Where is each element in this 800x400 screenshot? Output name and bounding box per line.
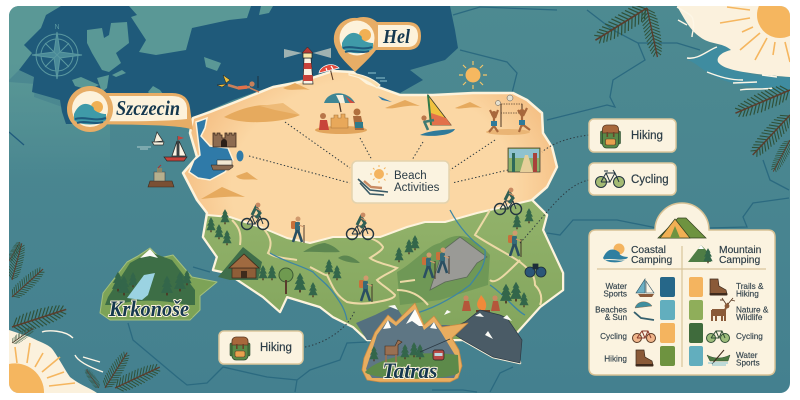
mountain row labels: Wildlife	[736, 313, 763, 322]
dotted connectors	[249, 122, 589, 347]
compass rose	[32, 24, 82, 79]
icon: sailboats and boats	[137, 132, 187, 187]
icon: castle	[213, 133, 236, 147]
tatra side mountains	[356, 305, 522, 363]
pin: Szczecin	[67, 86, 193, 132]
szczecin lagoon and water	[189, 96, 392, 180]
icon: beach umbrella	[319, 65, 339, 80]
icon: binoculars	[525, 264, 546, 277]
legend panel	[589, 203, 775, 375]
poland land: sand	[183, 71, 563, 363]
coastal row labels	[595, 282, 627, 364]
coastal swatches	[660, 277, 675, 366]
coastal camping header: Coastal	[631, 245, 666, 256]
pin: Szczecin: Szczecin	[116, 96, 180, 120]
coastal row labels: Cycling	[600, 332, 627, 341]
pin: Hel	[334, 17, 421, 72]
mountain row labels	[736, 282, 769, 368]
icon: log cabin	[229, 254, 259, 278]
callout: cycling: Cycling	[631, 174, 669, 186]
coastal row labels: Water	[605, 282, 627, 291]
region label: Tatras	[362, 303, 468, 383]
climbers on rock	[422, 248, 449, 279]
coastal row labels: Sports	[603, 290, 627, 298]
poland land: green mountain region	[203, 200, 563, 363]
icon: snorkeler	[217, 75, 259, 92]
corner: sun and waves top right	[676, 6, 790, 95]
coastal camping header	[603, 244, 672, 266]
baltic sea	[19, 6, 458, 124]
icon: lighthouse	[284, 47, 331, 84]
cyclists	[242, 188, 522, 240]
scandinavian and danish land	[72, 6, 273, 94]
mountain row labels: Water	[736, 351, 758, 360]
callout: hiking bottom: Hiking	[260, 342, 292, 354]
callout: hiking top: Hiking	[631, 130, 663, 142]
callout: beach activities: Activities	[394, 182, 440, 194]
hikers	[291, 216, 521, 302]
icon: windsurfer	[420, 95, 455, 136]
callout: hiking top	[589, 119, 676, 152]
mountain row labels: Sports	[736, 358, 760, 368]
region label: Krkonoše: Krkonoše	[108, 296, 189, 321]
region label: Krkonoše	[100, 248, 217, 321]
coastal row labels: & Sun	[605, 313, 627, 322]
coastal row labels: Beaches	[595, 306, 627, 314]
coastal row icons	[632, 279, 656, 366]
mountain camping header: Mountain	[719, 245, 762, 256]
icon: trail picture	[508, 148, 540, 172]
icon: sand castle family	[315, 93, 367, 134]
corner: sun and waves bottom left	[9, 330, 103, 393]
callout: beach activities	[352, 161, 449, 203]
western land	[9, 6, 65, 122]
mountain swatches	[689, 277, 703, 366]
callout: beach activities: Beach	[394, 170, 427, 182]
hel peninsula	[349, 73, 380, 88]
pin: Hel: Hel	[382, 26, 410, 48]
icon: tent	[658, 218, 706, 238]
forest trees	[206, 208, 534, 307]
mountain camping header: Camping	[719, 255, 760, 266]
callout: hiking bottom	[219, 331, 303, 364]
coastal camping header: Camping	[631, 255, 672, 266]
icon: ferry boat	[211, 160, 233, 170]
mountain row labels: Trails &	[736, 282, 764, 291]
icon: beach volleyball	[486, 95, 530, 135]
region label: Tatras: Tatras	[382, 358, 438, 383]
mountain row labels: Hiking	[736, 290, 759, 298]
sun over sea	[459, 61, 487, 89]
compass rose: N	[54, 24, 60, 31]
mountain camping header	[688, 245, 762, 266]
sand dunes	[201, 83, 482, 199]
baltic wave marks	[368, 73, 387, 81]
mountain row icons	[706, 279, 735, 365]
coastal row labels: Hiking	[604, 354, 627, 364]
mountain row labels: Nature &	[736, 306, 769, 314]
callout: cycling	[589, 163, 676, 195]
mountain row labels: Cycling	[736, 332, 763, 341]
icon: campfire and campers	[462, 295, 500, 311]
